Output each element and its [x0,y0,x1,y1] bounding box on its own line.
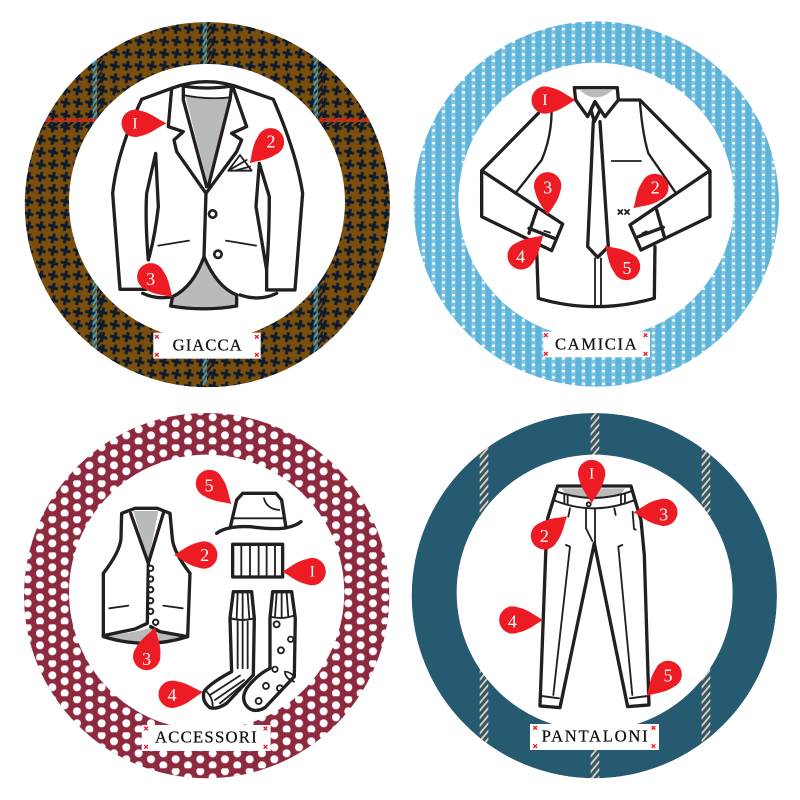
pin 1 [578,460,605,503]
dotted sock illustration [244,592,295,710]
panel: giacca [15,14,393,387]
pin 3: 3 [146,269,155,289]
patterned ring: polka dots [24,413,389,778]
patterned ring: dotted stripes [414,21,779,387]
pin 2: 2 [266,131,275,151]
label: camicia: CAMICIA [555,334,637,353]
pin 1: I [542,92,548,109]
pin 2 [174,541,217,569]
label: giacca: GIACCA [173,335,242,354]
pin 2: 2 [540,526,549,546]
pin 4 [499,606,543,634]
label: accessori [142,725,271,751]
pin 1 [282,558,326,585]
pin 4: 4 [516,247,525,267]
pin 3: 3 [142,649,151,669]
pin 3 [130,623,168,673]
pin 2 [624,168,674,218]
pin 1: I [589,465,594,482]
pin 5 [637,655,687,706]
pin 3 [534,172,561,215]
pin 1 [532,86,576,114]
pin 3 [131,257,182,307]
pin 4 [158,678,204,709]
pin 2: 2 [200,545,209,565]
pin 1 [122,110,167,137]
label: pantaloni [530,724,659,750]
pin 5 [190,464,241,514]
panel: accessori [24,413,389,778]
pin 2 [525,506,576,555]
pin 5: 5 [663,666,672,686]
pin 3 [633,499,677,526]
belly band illustration [233,544,283,577]
label: pantaloni: PANTALONI [542,727,648,746]
jacket illustration [113,82,303,309]
label: giacca [153,333,261,359]
striped sock illustration [203,592,254,708]
patterned ring: teal with chalk stripes [412,405,777,785]
pin 1: I [310,564,315,581]
pin 4: 4 [167,685,176,705]
panel: camicia [414,21,779,387]
pin 4 [502,225,553,275]
pin 3: 3 [543,177,552,197]
pin 5: 5 [204,476,213,496]
pin 5: 5 [622,258,631,278]
panel: pantaloni [412,405,777,785]
label: accessori: ACCESSORI [155,728,257,747]
label: camicia [543,332,650,357]
hat illustration [217,493,301,533]
trousers illustration [540,486,649,708]
patterned ring: houndstooth [15,14,393,387]
shirt illustration [482,88,710,307]
pin 5 [596,236,646,286]
pin 4: 4 [508,611,517,631]
pin 1: I [132,116,138,133]
pin 2: 2 [651,177,660,197]
waistcoat illustration [103,508,190,643]
pin 2 [240,122,290,173]
pin 3: 3 [659,505,668,525]
